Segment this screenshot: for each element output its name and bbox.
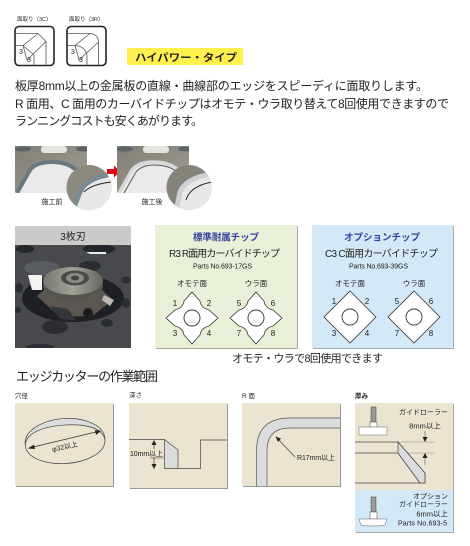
arrow: before to after [107,166,120,178]
panel: thickness: 8mm以上 [409,422,441,430]
panel: optional guide roller [355,490,453,532]
panel: standard R chip: Parts No.693-17GS [193,264,252,270]
panel: R surface: R17mm以上 [297,453,335,462]
intro text: 板厚8mm以上の金属板の直線・曲線部のエッジをスピーディに面取りします。 [15,78,428,93]
chip: C front: 2 [365,297,370,306]
panel: thickness: 厚み [355,392,368,400]
chip: R back: 6 [271,299,276,308]
panel: hole diameter [15,391,114,487]
panel: optional C chip: オモテ面 [335,279,365,288]
panel: optional C chip [312,225,454,349]
icon: round 3R: 3 [71,49,75,56]
panel: optional C chip: C3 C面用カーバイドチップ [325,248,438,260]
chip: C front: 4 [365,329,370,338]
chip: C back: 5 [395,297,400,306]
panel: thickness [355,392,454,533]
panel: 3-blade cutter photo [15,226,131,350]
icon: round 3R: 3 [79,57,83,64]
label: high power type: ハイパワー・タイプ [135,52,238,64]
intro text: R 面用、C 面用のカーバイドチップはオモテ・ウラ取り替えて8回使用できますので [15,96,449,111]
chip: R back: 5 [237,299,242,308]
panel: thickness: ガイドローラー [399,408,448,416]
chip: C back: 7 [395,329,400,338]
note: eight uses: オモテ・ウラで8回使用できます [232,352,383,365]
chip: C front: 1 [332,297,337,306]
intro text: ランニングコストも安くあがります。 [15,113,203,128]
chip: R back [230,292,282,344]
panel: standard R chip: R3 R面用カーバイドチップ [169,248,280,260]
chip: C front: 3 [332,329,337,338]
chip: R front: 3 [173,329,178,338]
photo: after machining [117,146,212,215]
label: high power type [127,48,243,65]
panel: depth [129,390,228,489]
intro text [15,78,449,128]
icon: chamfer 3C: 3 [27,57,31,64]
chip: R front: 1 [173,299,178,308]
panel: optional guide roller: 6mm以上 [416,510,448,518]
chip: R back: 8 [271,329,276,338]
icon: chamfer 3C: 3 [19,49,23,56]
panel: optional C chip: ウラ面 [403,279,426,288]
panel: standard R chip [155,225,298,349]
panel: R surface [242,392,341,487]
icon: round 3R [67,16,106,66]
panel: depth: 10mm以上 [130,449,163,458]
panel: standard R chip: オモテ面 [177,279,207,288]
chip: C back: 6 [429,297,434,306]
heading: working range: エッジカッターの作業範囲 [16,369,158,384]
chip: R back: 7 [237,329,242,338]
panel: optional C chip: オプションチップ [344,232,420,244]
chip: R front: 4 [207,329,212,338]
panel: hole diameter: φ32以上 [51,439,79,454]
icon: guide roller [359,407,387,435]
chip: C front [324,291,376,343]
caption: after: 施工後 [142,197,162,206]
panel: standard R chip: 標準耐属チップ [193,232,259,244]
panel: optional guide roller: Parts No.693-5 [398,520,447,528]
icon: chamfer 3C [15,16,54,66]
chip: C back: 8 [429,329,434,338]
panel: optional guide roller: オプション [413,492,448,500]
chip: R front: 2 [207,299,212,308]
chip: R front [166,292,218,344]
panel: hole diameter: 穴径 [15,391,28,400]
panel: optional C chip: Parts No.693-39GS [349,264,408,270]
panel: R surface: R 面 [242,392,256,400]
caption: before: 施工前 [42,197,62,206]
photo: before machining [15,146,112,215]
panel: depth: 深さ [129,390,142,399]
icon: chamfer 3C: 面取り（3C） [17,16,52,23]
panel: 3-blade cutter photo: 3枚刃 [60,230,86,243]
icon: round 3R: 面取り（3R） [69,16,104,23]
panel: standard R chip: ウラ面 [245,279,268,288]
panel: optional guide roller: ガイドローラー [399,500,448,508]
chip: C back [388,291,440,343]
